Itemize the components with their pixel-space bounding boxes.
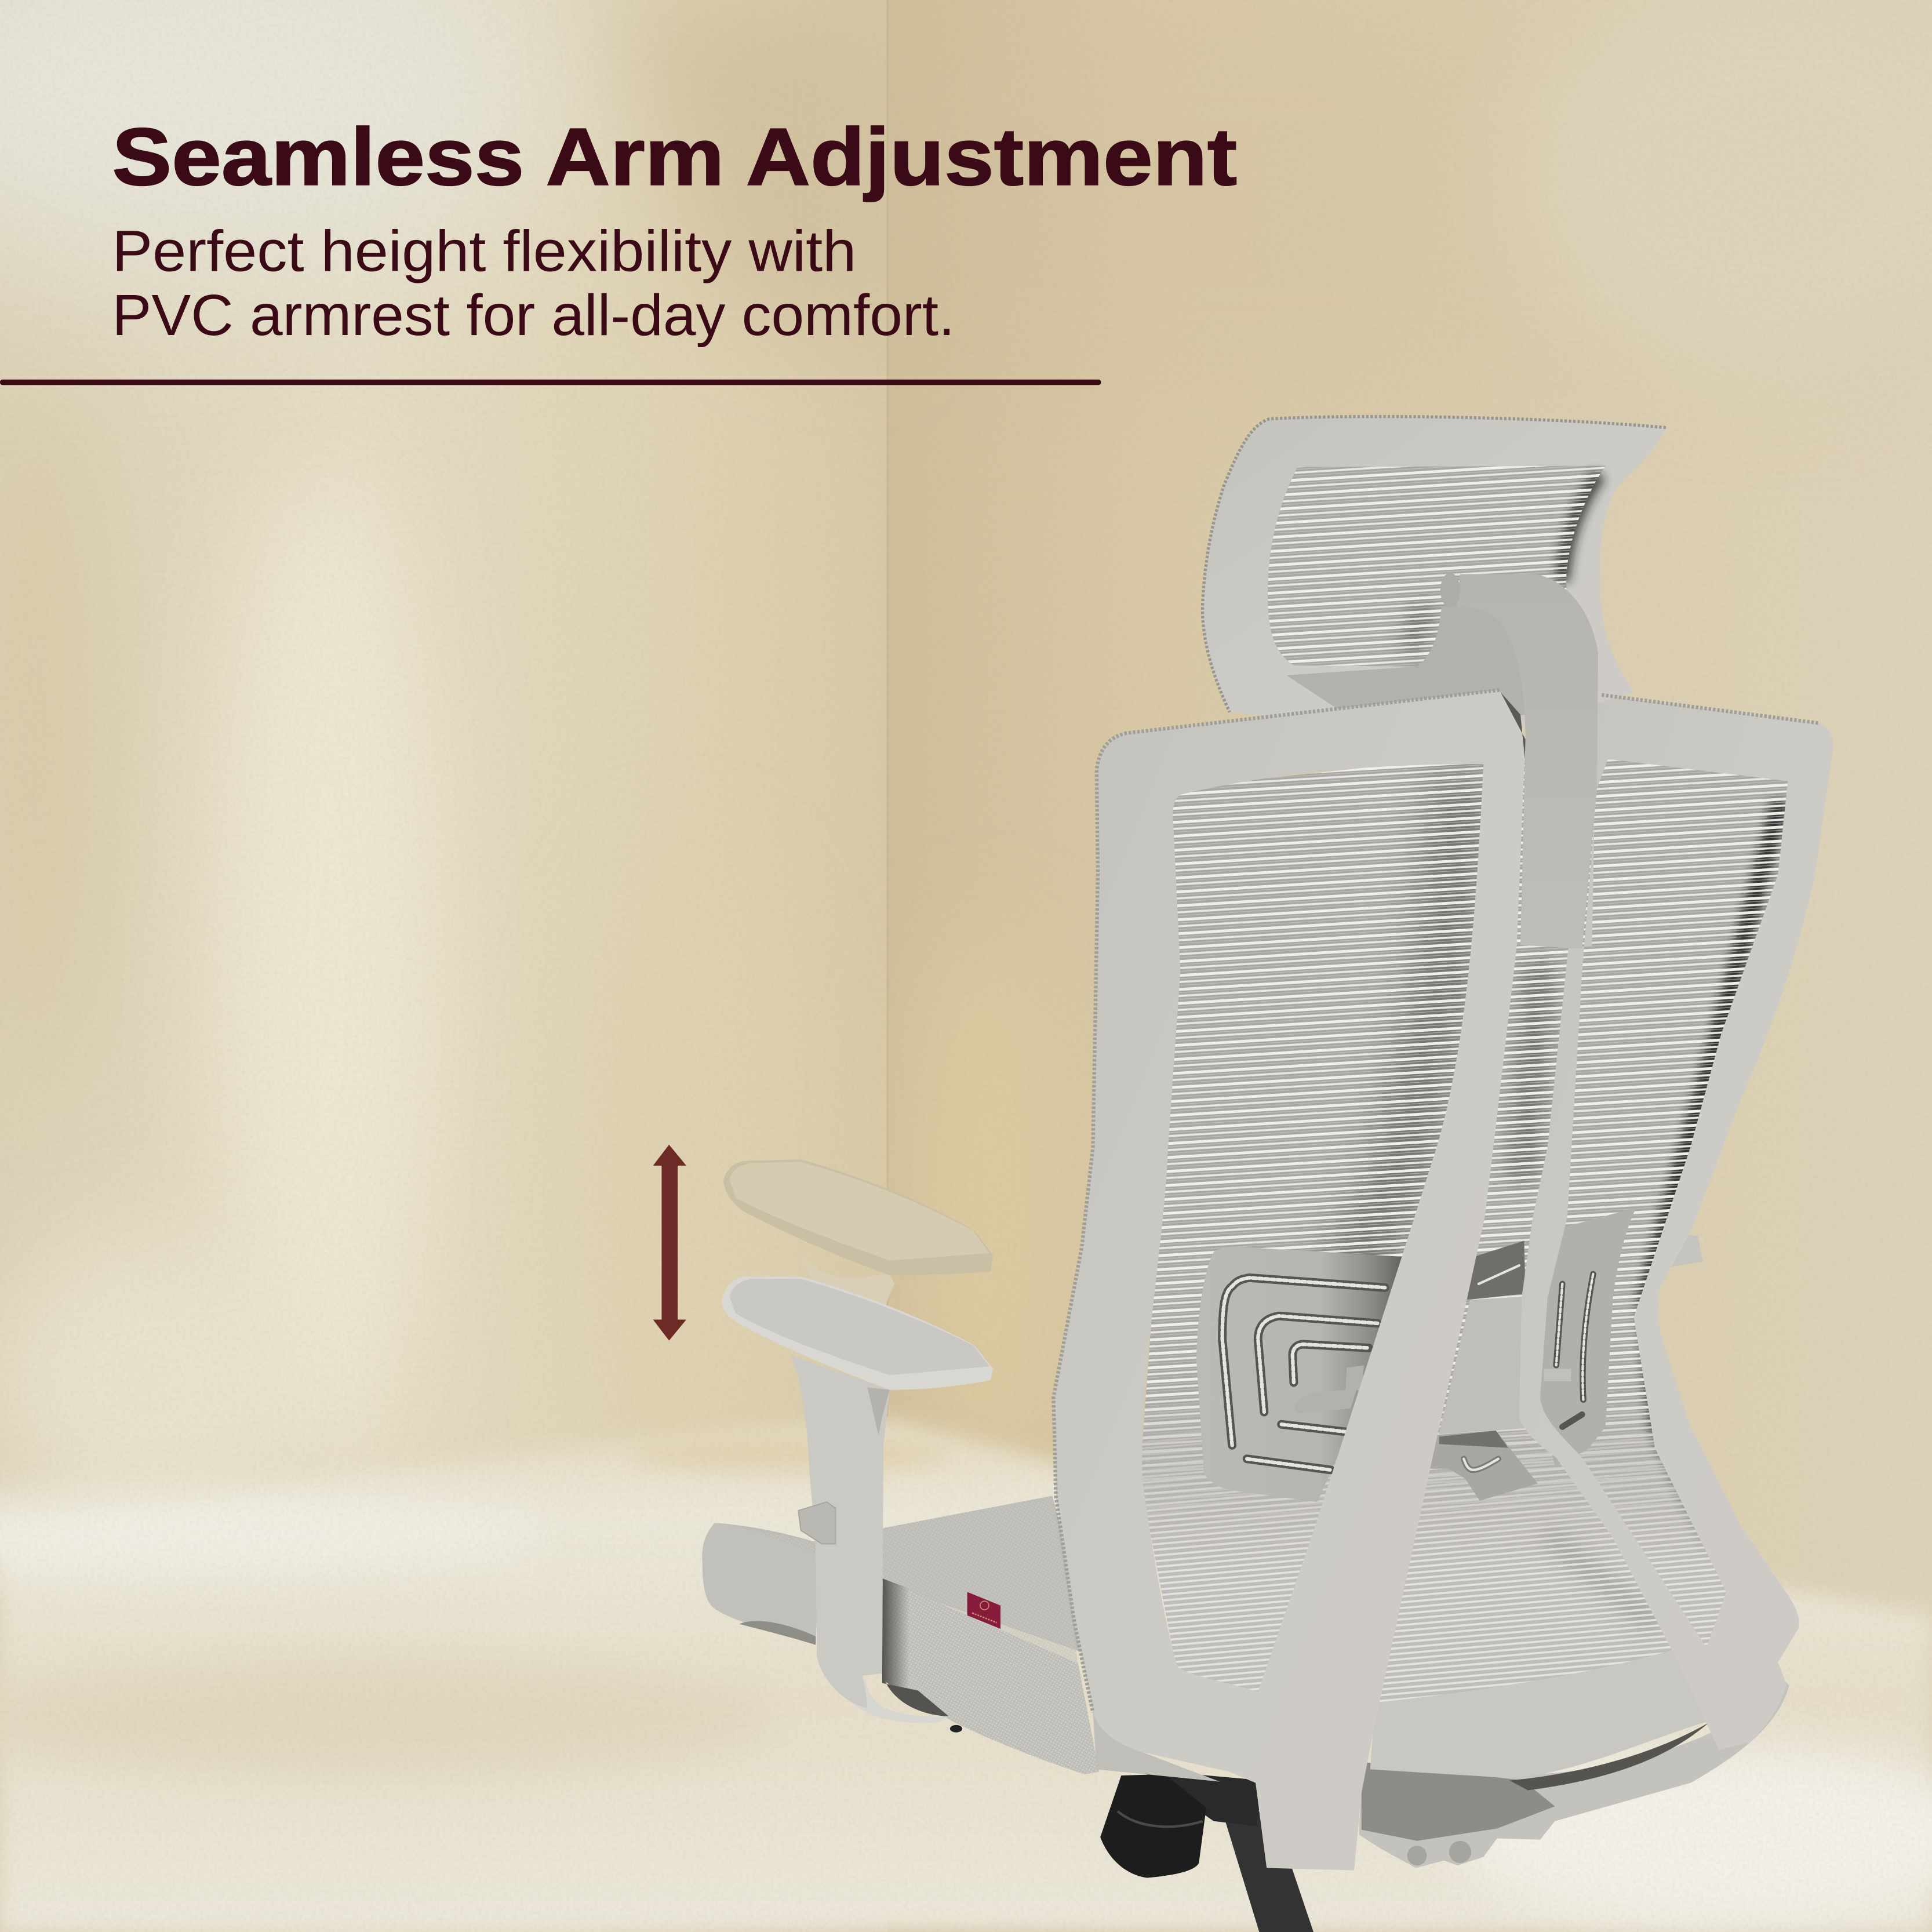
headrest support arm <box>1440 573 1598 949</box>
subtitle text: Perfect height flexibility with <box>112 220 856 284</box>
brand tag on seat <box>967 1592 1000 1629</box>
centre bar <box>1439 1296 1534 1434</box>
header rule <box>0 380 1101 385</box>
headrest support limb <box>1286 604 1528 721</box>
armrest: lower position with stem and bracket <box>722 1276 993 1733</box>
headrest <box>1202 417 1666 739</box>
backrest frame: left wing and diagonal strap <box>1053 690 1526 1871</box>
icon: double-headed height arrow <box>653 1145 686 1341</box>
subtitle text: PVC armrest for all-day comfort. <box>112 283 955 348</box>
upper dark plate behind strap <box>1467 1241 1526 1300</box>
subtitle text <box>112 220 955 348</box>
backrest mesh <box>1142 756 1788 1702</box>
lumbar slots <box>1222 1265 1593 1470</box>
backrest frame: right wing and spine <box>1519 695 1833 1749</box>
title: Seamless Arm Adjustment <box>112 111 1237 202</box>
lumbar adjuster tab <box>1294 1365 1364 1413</box>
right lumbar plate <box>1528 1207 1636 1467</box>
armrest: raised ghost position <box>723 1159 993 1318</box>
underside tilt mechanism <box>1359 1676 1789 1868</box>
left lumbar plate <box>1196 1247 1417 1502</box>
backrest fringe seam <box>1053 690 1820 1713</box>
headrest mesh <box>1268 465 1606 667</box>
gas lift pole and black tilt knob <box>1100 1769 1314 1932</box>
lower tab <box>1417 1431 1538 1501</box>
seat cushion <box>702 1496 1220 1782</box>
far armrest peeking behind chair <box>1651 1232 1703 1269</box>
seat back bottom band <box>1370 1650 1713 1791</box>
lumbar support plates <box>1196 1207 1636 1502</box>
headrest fringe seam <box>1202 417 1666 712</box>
